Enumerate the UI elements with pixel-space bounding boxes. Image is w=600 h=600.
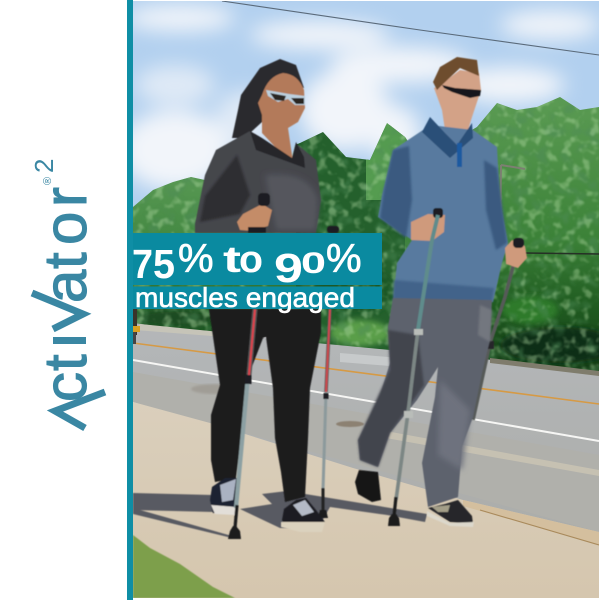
headline: 75% to 90%: 9 — [274, 245, 303, 291]
logo wordmark: t — [32, 252, 99, 269]
logo wordmark — [32, 187, 105, 431]
sidewalk — [133, 402, 599, 598]
woman sunglasses — [266, 90, 305, 105]
power line — [222, 1, 599, 55]
photo: two people Nordic walking — [120, 0, 600, 598]
woman front pole — [228, 309, 255, 539]
headline: 75% to 90%: % — [326, 237, 362, 281]
man hand on front grip — [411, 208, 445, 241]
banner: statistic — [132, 233, 382, 313]
woman right shoe — [281, 498, 325, 532]
headline: 75% to 90%: o — [239, 239, 263, 281]
road — [133, 323, 599, 545]
teal vertical divider — [127, 0, 133, 600]
logo wordmark: c — [32, 372, 99, 402]
yellow centre line — [133, 343, 599, 404]
man cargo trousers — [358, 298, 492, 507]
man hair — [433, 57, 479, 90]
man — [355, 57, 527, 527]
curb line — [463, 500, 599, 545]
banner subheading background — [133, 286, 382, 309]
headline: 75% to 90%: % — [178, 237, 214, 281]
woman jacket — [195, 131, 321, 233]
headline: 75% to 90%: t — [223, 239, 241, 280]
woman leggings — [209, 309, 321, 502]
woman hand on grip — [237, 193, 272, 233]
headline: 75% to 90% — [132, 237, 362, 291]
white edge line — [133, 360, 599, 441]
trees — [133, 95, 600, 380]
woman — [195, 59, 339, 539]
woman rear pole — [318, 226, 339, 518]
man rear pole — [472, 266, 515, 421]
woman neck and face — [258, 73, 305, 162]
logo wordmark: o — [32, 212, 99, 245]
man front pole — [388, 215, 438, 526]
man neck and face — [434, 70, 482, 130]
banner headline background — [133, 233, 382, 285]
man sunglasses — [442, 85, 481, 98]
shadows — [133, 491, 427, 538]
logo registered mark: ® — [42, 177, 54, 185]
logo: Activator 2 — [29, 159, 105, 431]
man left shoe — [355, 470, 381, 502]
grass — [133, 535, 235, 598]
sky — [133, 1, 599, 207]
overhead cable — [525, 253, 599, 254]
parked vehicle edge — [133, 309, 140, 344]
man shirt — [378, 117, 508, 302]
headline: 75% to 90%: 7 — [132, 241, 153, 287]
subheading: muscles engaged: muscles engaged — [135, 282, 355, 313]
logo wordmark: a — [32, 269, 99, 303]
utility pole — [500, 164, 526, 206]
headline: 75% to 90%: 0 — [301, 247, 326, 280]
man right shoe — [427, 500, 474, 527]
logo wordmark: t — [32, 354, 99, 371]
headline: 75% to 90%: 5 — [153, 241, 175, 287]
man right hand and grip — [505, 238, 527, 268]
logo superscript 2: 2 — [29, 159, 59, 173]
woman left shoe — [210, 478, 238, 515]
woman hair — [232, 59, 304, 138]
road shoulder — [133, 372, 360, 413]
logo wordmark: r — [32, 187, 99, 207]
